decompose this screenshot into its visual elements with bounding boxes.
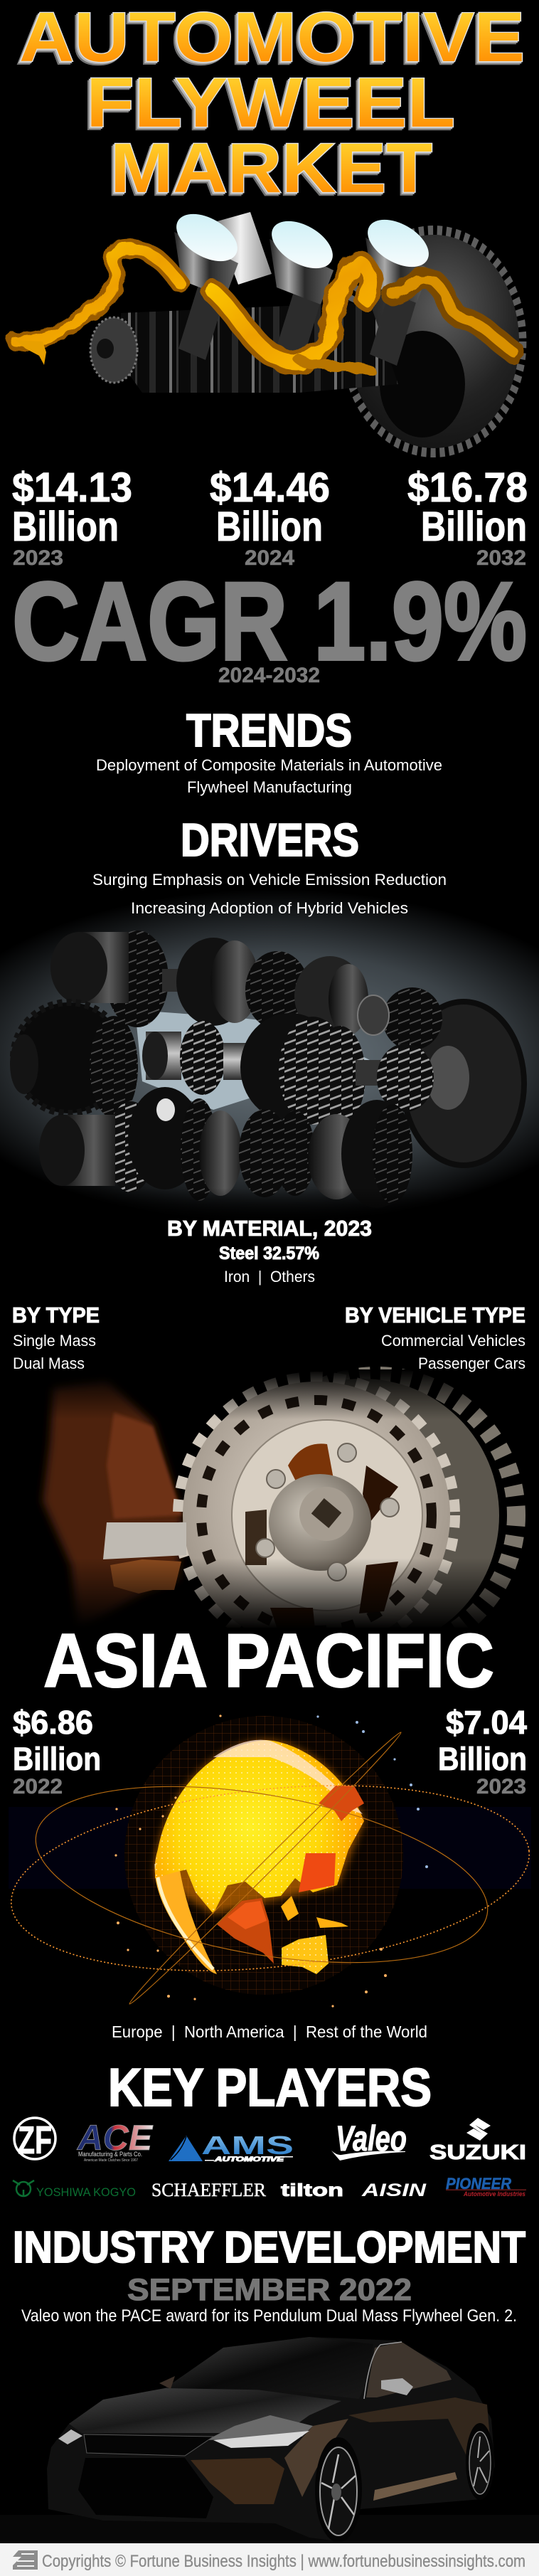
by material (167, 1216, 372, 1286)
stat 2032: $16.78 (407, 465, 528, 511)
trends: TRENDS (186, 704, 352, 756)
title: FLYWEEL (86, 63, 455, 142)
drivers: Surging Emphasis on Vehicle Emission Reduction (92, 871, 447, 889)
mesh sphere (124, 1716, 403, 1995)
fender reflection (284, 2419, 348, 2497)
by material: Iron | Others (224, 1268, 315, 1286)
middle gears (10, 1002, 434, 1125)
stat 2024 (210, 465, 330, 570)
trends: Flywheel Manufacturing (187, 778, 352, 796)
region stat 2023 (438, 1704, 527, 1798)
market size figures (12, 465, 528, 570)
white north edge (213, 1740, 363, 1814)
logo: Suzuki (429, 2118, 526, 2164)
logo: Tilton: tilton (281, 2180, 343, 2200)
rear chainrings (238, 1376, 516, 1655)
windshield (165, 2337, 373, 2399)
logo: AMS Automotive (169, 2131, 294, 2163)
rear wheel (466, 2423, 494, 2500)
by type: BY TYPE (12, 1303, 100, 1327)
oil drop (16, 340, 46, 365)
region stat 2022: $6.86 (13, 1704, 93, 1741)
logo: ACE: ACE (76, 2118, 154, 2158)
region stat 2022: 2022 (13, 1775, 63, 1798)
back piston (215, 212, 272, 285)
by type: Dual Mass (13, 1355, 85, 1372)
region heading: ASIA PACIFIC (43, 1618, 494, 1703)
ground fade (0, 1188, 539, 1224)
crankshaft (121, 302, 398, 393)
pistons (169, 204, 245, 360)
region stat 2023: Billion (438, 1741, 527, 1777)
illustration: engine with golden oil (16, 204, 522, 452)
title: AUTOMOTIVE (19, 0, 525, 76)
body (47, 2337, 495, 2542)
disc at right (403, 1002, 524, 1165)
logo: Fortune Business Insights (13, 2550, 38, 2570)
logo: Suzuki: SUZUKI (429, 2141, 526, 2164)
logo: ACE: Manufacturing & Parts Co. (78, 2151, 142, 2158)
fingers (110, 1559, 181, 1594)
mirror (381, 2378, 413, 2395)
regions list: Europe | North America | Rest of the World (112, 2023, 427, 2041)
lower bumper reflection (191, 2458, 284, 2504)
bottom gears (39, 1087, 412, 1208)
flywheel ring gear (346, 231, 522, 452)
main chainring (180, 1379, 453, 1652)
oil streams (16, 249, 513, 370)
hood (69, 2387, 341, 2433)
illustration: black car (0, 2337, 539, 2543)
top gears (50, 931, 442, 1050)
logo: Yoshiwa Kogyo: YOSHIWA KOGYO (36, 2185, 136, 2199)
stat 2023 (12, 465, 132, 570)
logo: AMS Automotive: AUTOMOTIVE (213, 2156, 285, 2163)
side windows (366, 2342, 452, 2397)
hub (269, 1474, 371, 1571)
headlights (213, 2431, 309, 2448)
spider cut-outs (288, 1443, 336, 1505)
stat 2032: 2032 (476, 546, 526, 570)
region stat 2022 (13, 1704, 101, 1798)
india (217, 1898, 274, 1963)
logo: Valeo: Valeo (336, 2119, 407, 2158)
logo: ACE: American Made Clutches Since 1967 (84, 2158, 138, 2163)
by vehicle type (345, 1303, 525, 1372)
stat 2023: Billion (12, 504, 119, 550)
orbit rings (2, 1728, 538, 2008)
logo: AMS Automotive: AMS (201, 2131, 294, 2160)
door reflection (348, 2397, 491, 2461)
halo (155, 1740, 364, 1914)
by vehicle type: Commercial Vehicles (381, 1332, 525, 1350)
logo: Pioneer (446, 2175, 526, 2198)
logo: Schaeffler: SCHAEFFLER (151, 2180, 267, 2200)
Asia landmass (155, 1740, 364, 1914)
stat 2032 (407, 465, 528, 570)
bottom fade (0, 1558, 539, 1629)
red regions (319, 1786, 364, 1821)
background glow (0, 889, 539, 1224)
bolts (256, 1443, 399, 1581)
by type (12, 1303, 100, 1372)
trends (96, 704, 442, 796)
illustration: transmission gears (0, 889, 539, 1252)
stat 2023: 2023 (13, 546, 63, 570)
stat 2024: Billion (216, 504, 323, 550)
night sky band (9, 1807, 531, 1889)
logo: Aisin: AISIN (361, 2180, 427, 2200)
grille (84, 2434, 213, 2456)
front intake (78, 2458, 213, 2518)
drivers: Increasing Adoption of Hybrid Vehicles (131, 899, 408, 917)
floor (0, 2515, 539, 2543)
stat 2024: $14.46 (210, 465, 330, 511)
illustration: glowing globe (2, 1714, 538, 2008)
region stat 2023: 2023 (476, 1775, 526, 1798)
logo: Pioneer: Automotive Industries (463, 2190, 525, 2198)
by type: Single Mass (13, 1332, 96, 1350)
date: SEPTEMBER 2022 (127, 2273, 412, 2307)
drivers: DRIVERS (181, 814, 359, 866)
drivers (92, 814, 447, 917)
bright limb crescent (155, 1850, 217, 1974)
by vehicle type: BY VEHICLE TYPE (345, 1303, 525, 1327)
top fade (0, 1369, 539, 1419)
by vehicle type: Passenger Cars (418, 1355, 525, 1372)
by material: BY MATERIAL, 2023 (167, 1216, 372, 1241)
region stat 2023: $7.04 (446, 1704, 527, 1741)
CAGR: 2024-2032 (218, 664, 320, 687)
logo: ZF: ZF (18, 2118, 52, 2162)
stars (114, 1714, 387, 2008)
logo: Pioneer: PIONEER (446, 2175, 511, 2193)
front wheel (315, 2437, 362, 2543)
by material: Steel 32.57% (219, 1244, 319, 1263)
region stat 2022: Billion (13, 1741, 101, 1777)
key players heading: KEY PLAYERS (108, 2057, 432, 2117)
stat 2023: $14.13 (12, 465, 132, 511)
logo: Valeo (331, 2119, 407, 2161)
title (19, 0, 525, 207)
australia (282, 1935, 329, 1974)
front pulley (90, 317, 137, 383)
stat 2024: 2024 (245, 546, 294, 570)
title: MARKET (110, 129, 432, 207)
south-east asia (281, 1896, 299, 1921)
wrench (103, 1522, 186, 1559)
footer (0, 2543, 539, 2576)
sill reflection (373, 2472, 457, 2501)
hand (43, 1380, 182, 1629)
illustration: hand tightening chainring (0, 1369, 539, 1693)
trends: Deployment of Composite Materials in Automotive (96, 756, 442, 774)
back light patches (135, 1010, 370, 1110)
logo: Yoshiwa Kogyo (13, 2180, 136, 2199)
